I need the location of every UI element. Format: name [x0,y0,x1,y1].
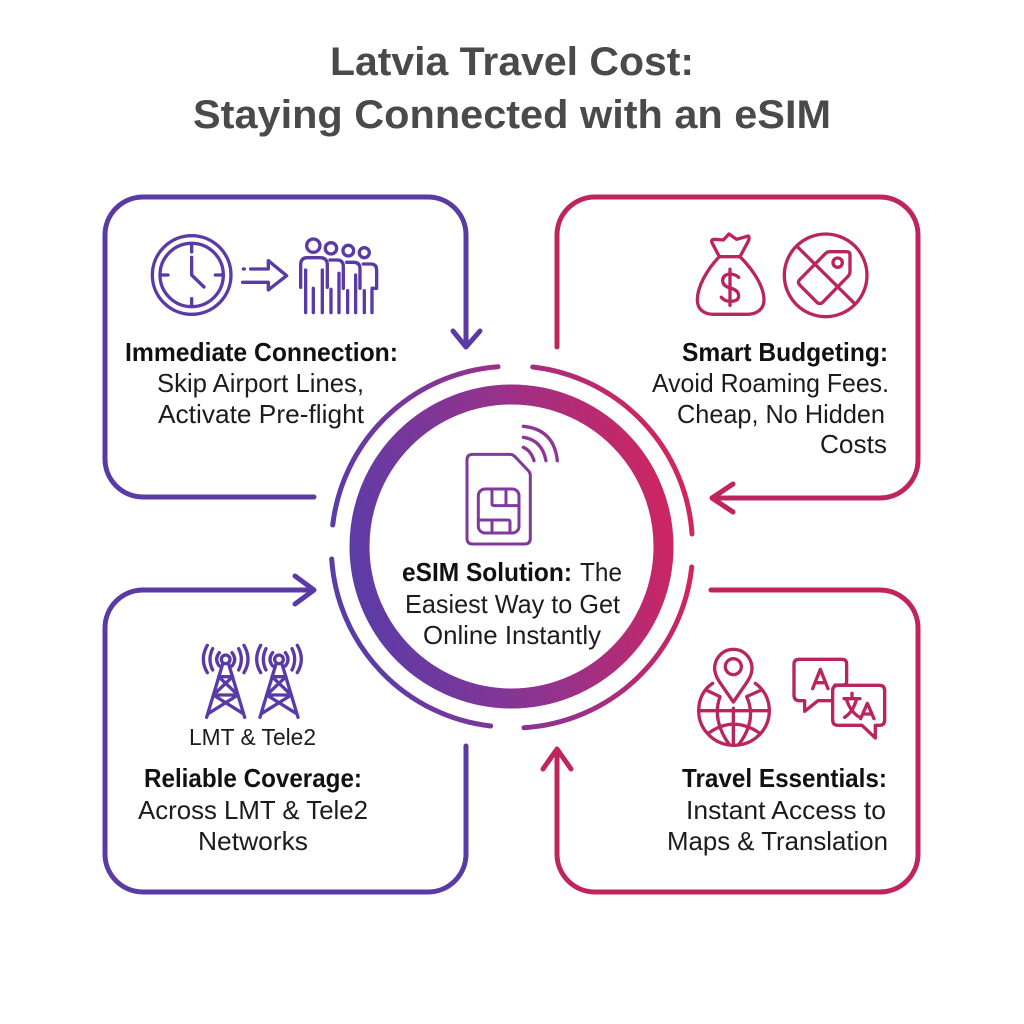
panel: immediate connection [105,197,480,497]
text: travel essentials: Travel Essentials: [682,763,887,793]
text: reliable coverage: Networks [198,826,308,856]
icon: money bag and crossed price tag [697,234,867,317]
panel outline with arrow to centre [543,590,918,892]
panel: smart budgeting [557,197,918,512]
title: Staying Connected with an eSIM [193,93,831,137]
text: smart budgeting [652,337,889,459]
text: travel essentials [667,763,888,856]
text: immediate connection: Activate Pre-flight [158,399,365,429]
panel: reliable coverage [105,576,466,892]
text: smart budgeting: Avoid Roaming Fees. [652,368,889,398]
text: travel essentials: Maps & Translation [667,826,888,856]
icon: two network towers [203,645,301,717]
icon: clock to people in line [152,236,377,314]
title [193,40,831,137]
text: eSIM solution: eSIM Solution: [402,557,572,587]
text: eSIM solution: The [580,557,622,587]
text: reliable coverage [138,763,368,856]
label: LMT and Tele2: LMT & Tele2 [189,724,316,750]
panel outline with arrow to centre [105,197,480,497]
panel: travel essentials [543,590,918,892]
panel outline with arrow to centre [557,197,918,512]
centre: eSIM solution ring [332,367,692,728]
text: smart budgeting: Cheap, No Hidden [677,399,885,429]
text: smart budgeting: Smart Budgeting: [682,337,888,367]
text: immediate connection: Immediate Connection: [125,337,398,367]
text: eSIM solution [402,557,622,650]
text: reliable coverage: Across LMT & Tele2 [138,795,368,825]
text: smart budgeting: Costs [820,429,887,459]
text: eSIM solution: Online Instantly [423,620,601,650]
text: reliable coverage: Reliable Coverage: [144,763,362,793]
outer arc segments [332,367,692,728]
text: immediate connection [125,337,398,429]
title: Latvia Travel Cost: [330,40,694,84]
gradient ring [360,394,664,698]
icon: SIM card with signal waves [467,426,557,544]
text: eSIM solution: Easiest Way to Get [405,589,621,619]
icon: globe with pin and translation bubbles [699,649,885,745]
text: immediate connection: Skip Airport Lines, [157,368,364,398]
panel outline with arrow to centre [105,576,466,892]
text: travel essentials: Instant Access to [686,795,886,825]
